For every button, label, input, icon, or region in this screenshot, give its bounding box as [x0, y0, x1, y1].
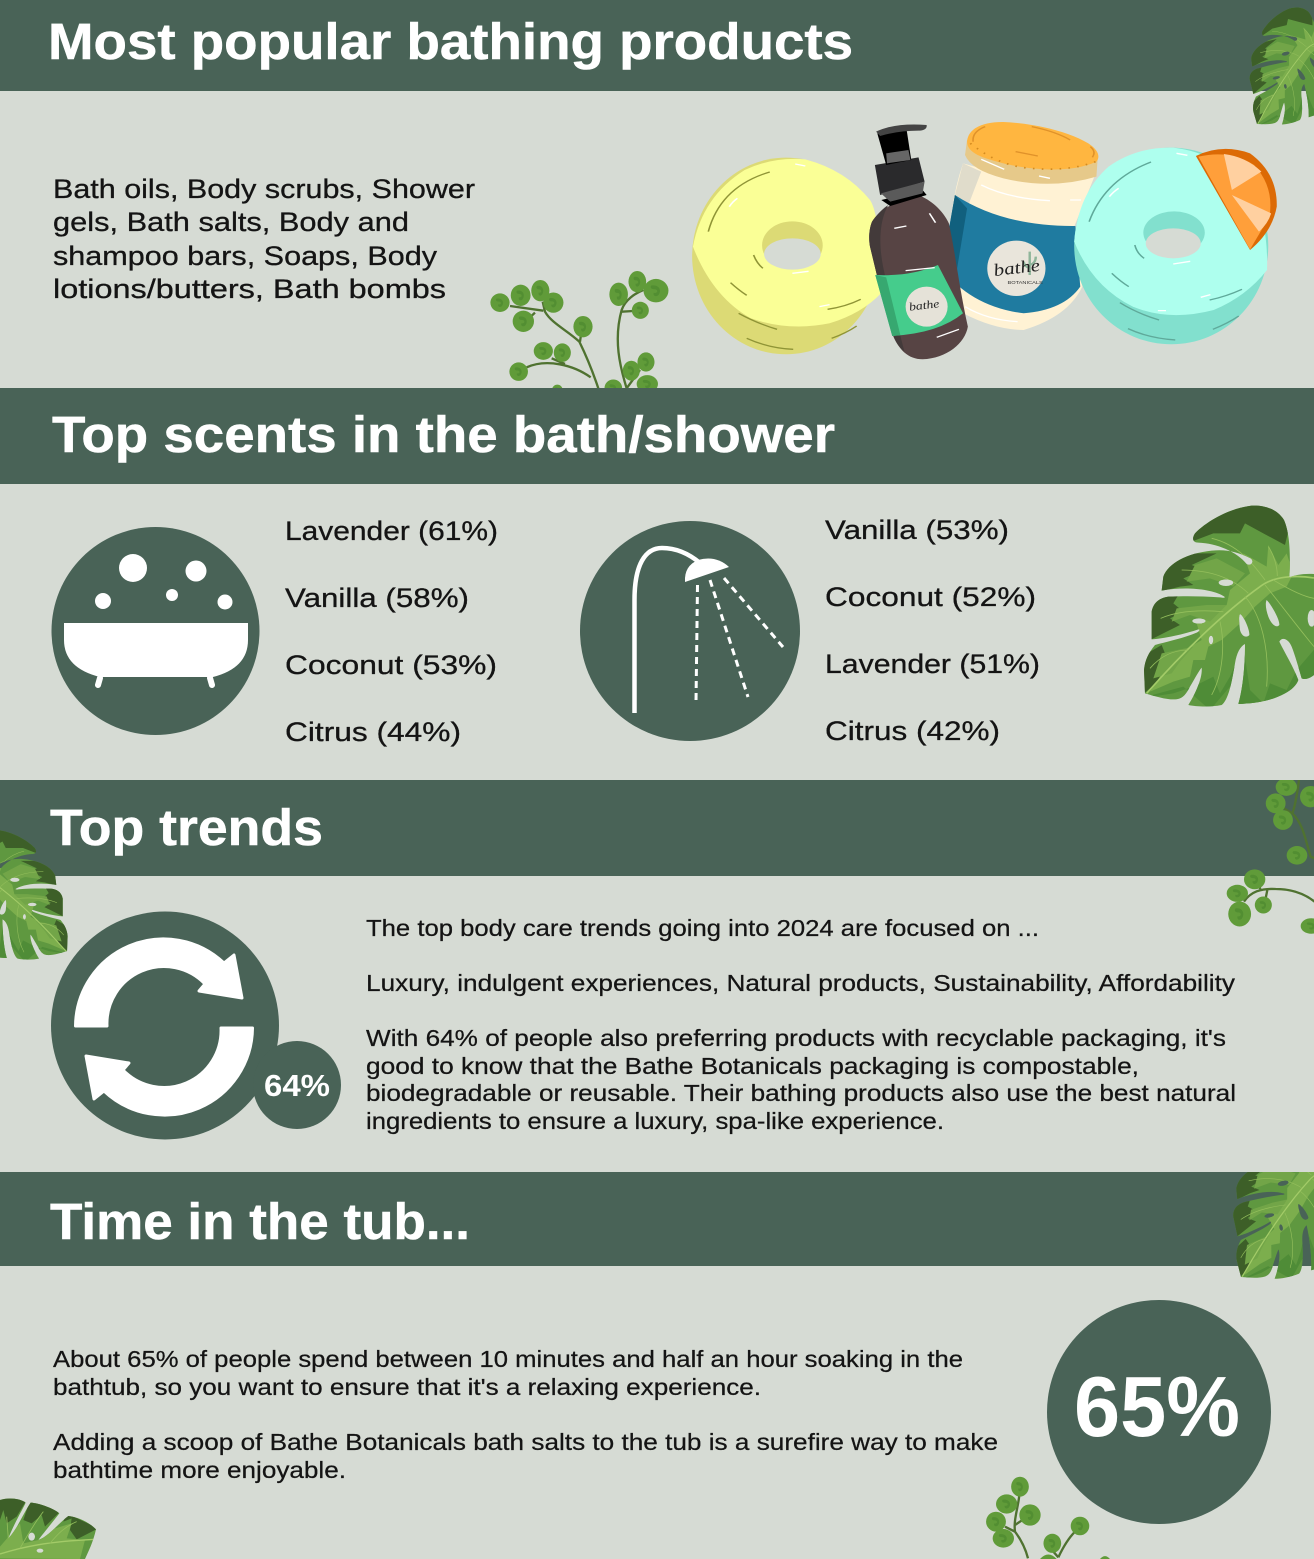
- header band: trends: [0, 780, 1314, 876]
- text block: trends: biodegradable or reusable. Their bathing products also use the best natural: [366, 1080, 1236, 1106]
- illustration: bottom left monstera leaf: [0, 1497, 98, 1559]
- blue jar: BOTANICALS: [1007, 280, 1043, 286]
- list: shower scents: Citrus (42%): [825, 716, 1000, 746]
- heading: most popular bathing products: Most popular bathing products: [48, 13, 853, 70]
- illustration: corner monstera leaf top right: [1228, 0, 1314, 134]
- text block: time in tub: Adding a scoop of Bathe Botanicals bath salts to the tub is a surefire way to make: [53, 1429, 998, 1455]
- teal bath bomb with orange slice: [1074, 148, 1277, 344]
- header band: products: [0, 0, 1314, 91]
- text block: product list: shampoo bars, Soaps, Body: [53, 241, 438, 271]
- heading: time in the tub: Time in the tub...: [50, 1193, 470, 1250]
- text block: time in tub: bathtub, so you want to ensure that it's a relaxing experience.: [53, 1374, 761, 1400]
- badge: 65%: [1047, 1300, 1271, 1524]
- pump bottle: bathe: [908, 297, 941, 313]
- illustration: monstera leaf on tub header: [1233, 1172, 1314, 1279]
- list: shower scents: [825, 515, 1040, 746]
- badge: 64%: [253, 1041, 341, 1129]
- text block: time in tub: bathtime more enjoyable.: [53, 1457, 346, 1483]
- icon: recycle arrows: [51, 912, 279, 1140]
- header band: scents: [0, 388, 1314, 484]
- heading: top trends: Top trends: [50, 799, 323, 856]
- text block: product list: gels, Bath salts, Body and: [53, 207, 409, 237]
- text block: product list: Bath oils, Body scrubs, Shower: [53, 174, 475, 204]
- text block: product list: lotions/butters, Bath bombs: [53, 274, 446, 304]
- illustration: bath products: [692, 122, 1277, 359]
- icon: bathtub: [52, 527, 260, 735]
- pump bottle: [869, 125, 968, 359]
- blue jar: [942, 122, 1098, 330]
- yellow bath bomb: [692, 158, 881, 354]
- list: bath scents: [285, 516, 498, 747]
- text block: trends: With 64% of people also preferring products with recyclable packaging, it's: [366, 1025, 1226, 1051]
- illustration: left monstera leaf: [0, 825, 70, 962]
- text block: trends: The top body care trends going into 2024 are focused on ...: [366, 915, 1039, 941]
- text block: time in tub: [53, 1346, 998, 1483]
- text block: product list: [53, 174, 475, 304]
- list: bath scents: Vanilla (58%): [285, 583, 469, 613]
- header band: time in the tub: [0, 1172, 1314, 1266]
- list: bath scents: Citrus (44%): [285, 717, 461, 747]
- text block: trends: ingredients to ensure a luxury, spa-like experience.: [366, 1108, 944, 1134]
- illustration: large monstera leaf: [1140, 498, 1314, 710]
- text block: time in tub: About 65% of people spend between 10 minutes and half an hour soaking in the: [53, 1346, 963, 1372]
- list: shower scents: Lavender (51%): [825, 649, 1040, 679]
- list: shower scents: Coconut (52%): [825, 582, 1036, 612]
- illustration: bottom vine: [986, 1477, 1110, 1559]
- heading: top scents: Top scents in the bath/shower: [52, 406, 835, 463]
- badge: 64%: 64%: [264, 1068, 330, 1103]
- text block: trends: good to know that the Bathe Botanicals packaging is compostable,: [366, 1053, 1139, 1079]
- icon: shower: [580, 521, 800, 741]
- blue jar: bathe: [992, 256, 1042, 280]
- text block: trends: Luxury, indulgent experiences, Natural products, Sustainability, Affordability: [366, 970, 1235, 996]
- illustration: vine right of trends: [1227, 778, 1314, 934]
- badge: 65%: 65%: [1074, 1360, 1240, 1455]
- text block: trends: [366, 915, 1236, 1134]
- list: shower scents: Vanilla (53%): [825, 515, 1009, 545]
- list: bath scents: Lavender (61%): [285, 516, 498, 546]
- list: bath scents: Coconut (53%): [285, 650, 497, 680]
- illustration: vine beside products: [490, 271, 668, 397]
